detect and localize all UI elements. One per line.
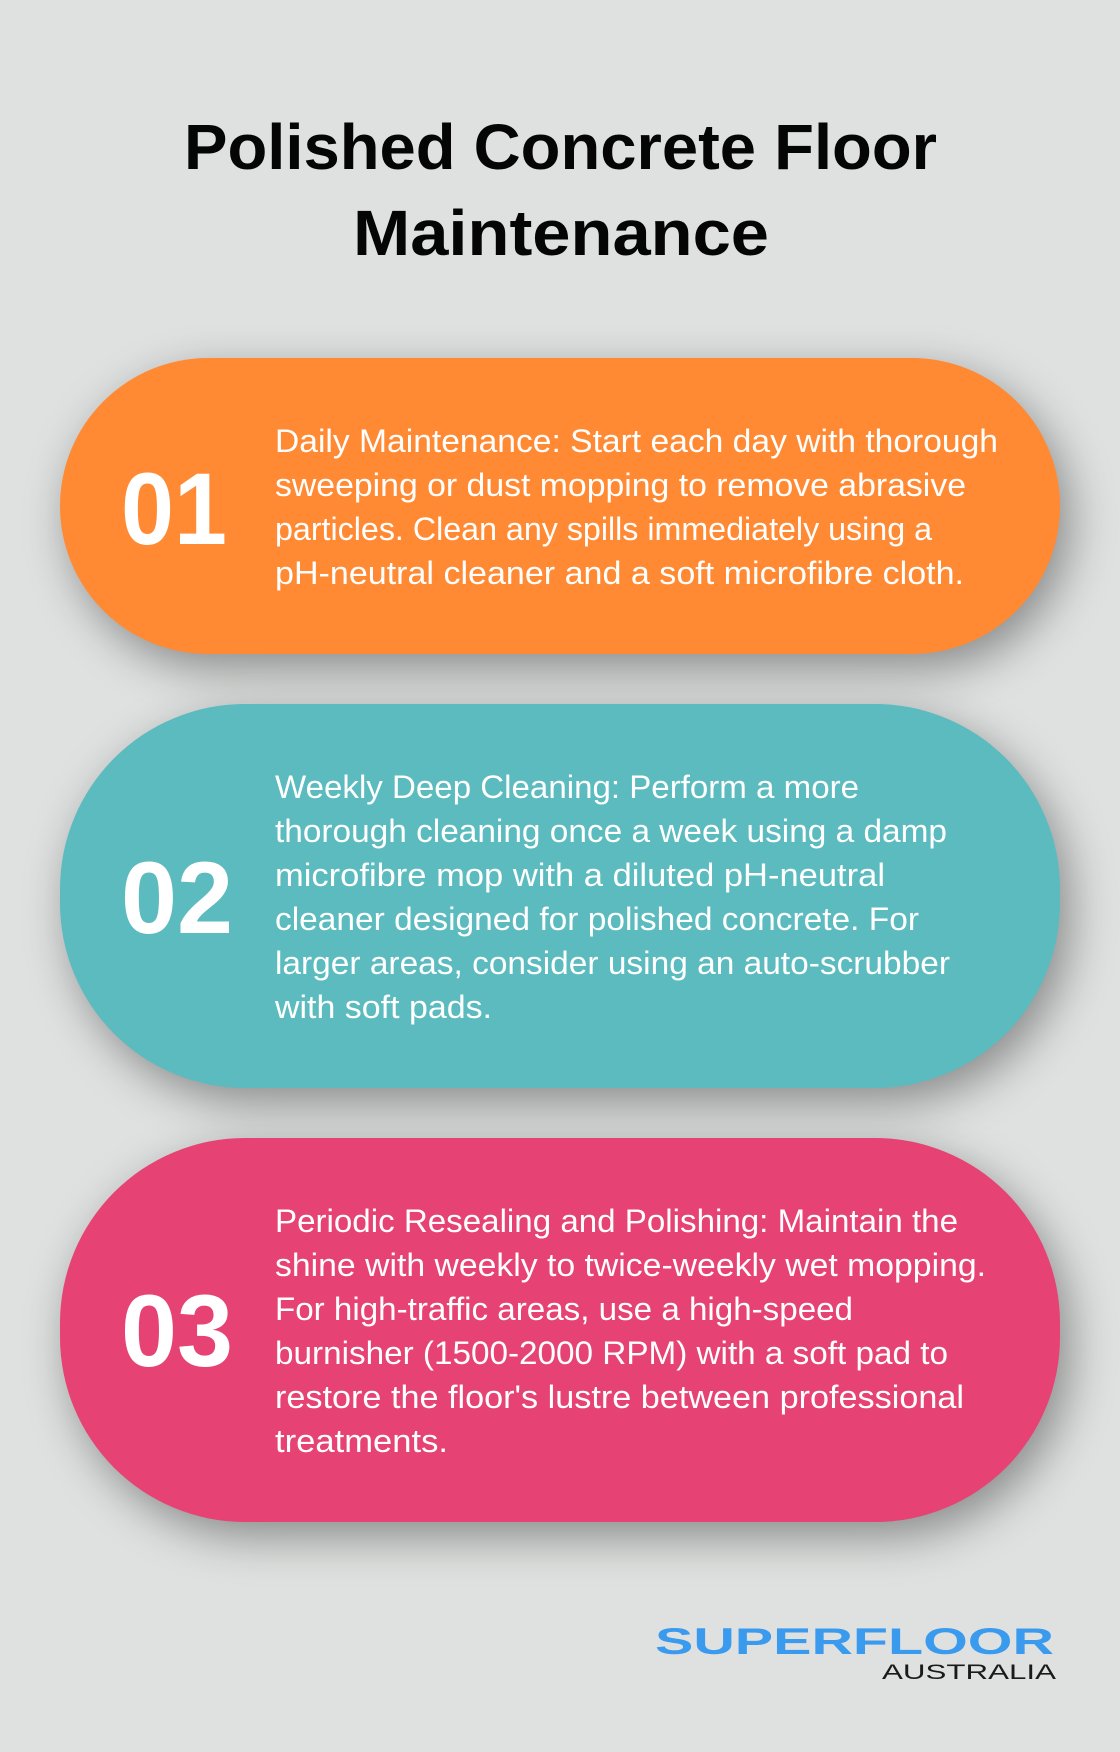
step text: daily maintenance bbox=[275, 423, 998, 591]
step text: weekly deep cleaning: cleaner designed for polished concrete. For bbox=[275, 901, 919, 937]
step text: daily maintenance: sweeping or dust mopping to remove abrasive bbox=[275, 467, 966, 503]
panel: daily maintenance bbox=[60, 358, 1060, 654]
step text: daily maintenance: Daily Maintenance: Start each day with thorough bbox=[275, 423, 998, 459]
step text: daily maintenance: pH-neutral cleaner and a soft microfibre cloth. bbox=[275, 555, 964, 591]
step text: periodic resealing and polishing: restore the floor's lustre between professional bbox=[275, 1379, 964, 1415]
step text: periodic resealing and polishing: Periodic Resealing and Polishing: Maintain the bbox=[275, 1203, 958, 1239]
title: Maintenance bbox=[353, 197, 769, 269]
step text: weekly deep cleaning: larger areas, consider using an auto-scrubber bbox=[275, 945, 950, 981]
step text: weekly deep cleaning: Weekly Deep Cleaning: Perform a more bbox=[275, 769, 859, 805]
step number 01: 01 bbox=[121, 452, 227, 566]
logo: Superfloor Australia: AUSTRALIA bbox=[882, 1661, 1056, 1684]
step text: weekly deep cleaning: microfibre mop with a diluted pH-neutral bbox=[275, 857, 885, 893]
step text: periodic resealing and polishing: treatments. bbox=[275, 1423, 448, 1459]
step text: weekly deep cleaning: with soft pads. bbox=[274, 989, 492, 1025]
panel: weekly deep cleaning bbox=[60, 704, 1060, 1088]
title bbox=[184, 111, 937, 269]
title: Polished Concrete Floor bbox=[184, 111, 937, 183]
step text: periodic resealing and polishing: For high-traffic areas, use a high-speed bbox=[275, 1291, 853, 1327]
step text: periodic resealing and polishing bbox=[275, 1203, 986, 1459]
step text: periodic resealing and polishing: shine with weekly to twice-weekly wet mopping. bbox=[275, 1247, 986, 1283]
step number 02: 02 bbox=[121, 841, 233, 955]
step text: weekly deep cleaning bbox=[274, 769, 950, 1025]
logo: Superfloor Australia: SUPERFLOOR bbox=[655, 1621, 1054, 1662]
logo: Superfloor Australia bbox=[655, 1621, 1056, 1684]
step text: periodic resealing and polishing: burnisher (1500-2000 RPM) with a soft pad to bbox=[275, 1335, 948, 1371]
step text: daily maintenance: particles. Clean any spills immediately using a bbox=[275, 511, 933, 547]
panel: periodic resealing and polishing bbox=[60, 1138, 1060, 1522]
step text: weekly deep cleaning: thorough cleaning once a week using a damp bbox=[275, 813, 947, 849]
step number 03: 03 bbox=[121, 1274, 233, 1388]
